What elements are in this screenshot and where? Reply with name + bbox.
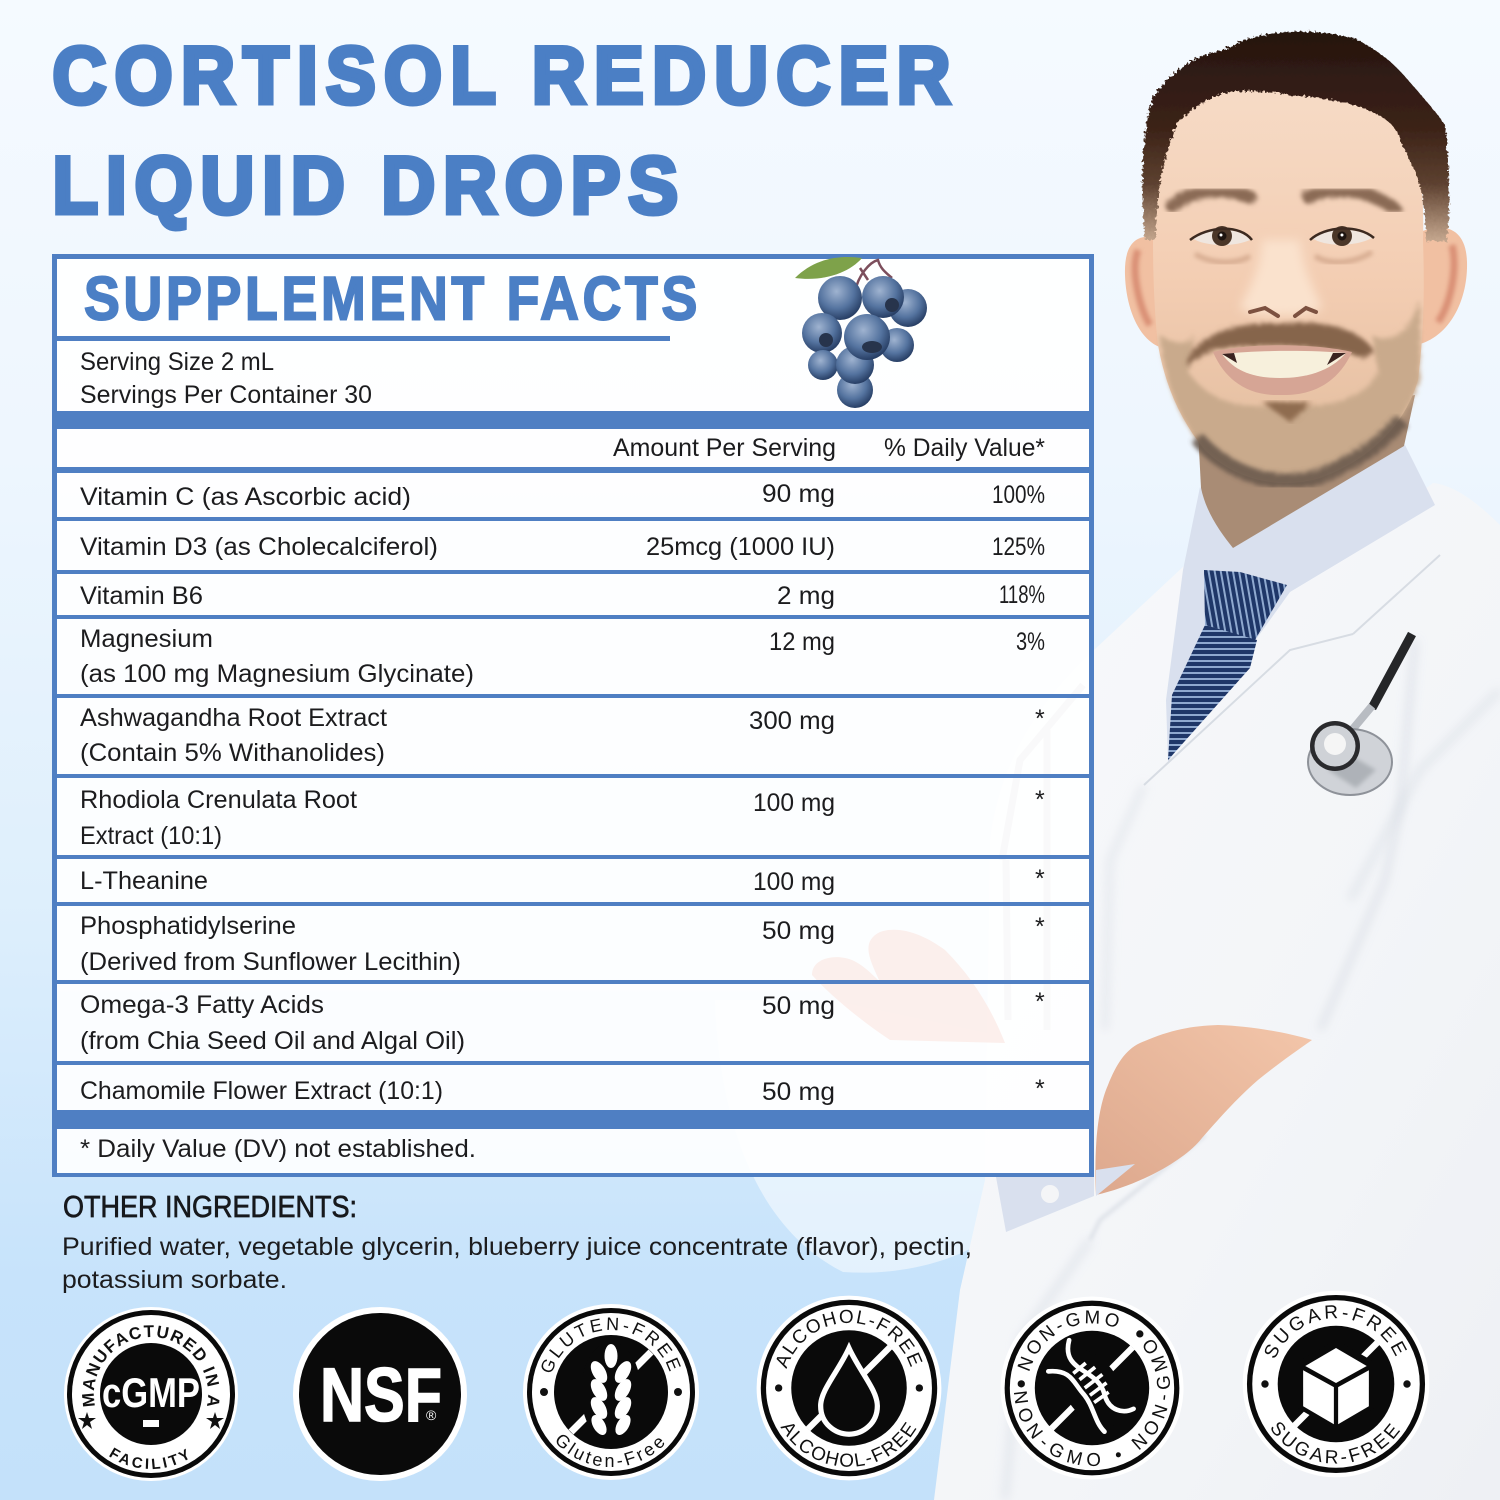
row: phosphatidylserine: * (1035, 913, 1045, 941)
row: vitamin B6 (80, 581, 1045, 610)
doctor: tie (1168, 570, 1287, 760)
row: rhodiola: * (1035, 786, 1045, 814)
row: chamomile: * (1035, 1075, 1045, 1103)
column headers: Amount Per Serving (613, 434, 836, 462)
row: vitamin B6: 118% (999, 581, 1045, 609)
row: ashwagandha: 300 mg (749, 707, 835, 735)
doctor: forearm (1095, 1025, 1312, 1195)
ingredient list (62, 1233, 972, 1294)
doctor: eyebrows (1172, 191, 1396, 210)
row: ashwagandha: Ashwagandha Root Extract (80, 704, 387, 732)
doctor: beard (1160, 300, 1420, 483)
row: vitamin B6: 2 mg (777, 582, 835, 610)
badge: gluten free (523, 1304, 699, 1480)
row: magnesium: 3% (1016, 628, 1045, 656)
badge: cGMP: FACILITY (109, 1448, 188, 1470)
row: rhodiola: Rhodiola Crenulata Root (80, 786, 357, 814)
badge: cGMP (64, 1307, 238, 1481)
doctor: faded sleeve behind table (715, 1000, 1020, 1273)
row: phosphatidylserine: 50 mg (762, 917, 835, 945)
other ingredients (62, 1189, 972, 1294)
ingredient list: potassium sorbate. (62, 1266, 287, 1294)
row: l-theanine (80, 865, 1045, 896)
badge: NSF (293, 1307, 467, 1481)
serving info: Serving Size 2 mL (80, 348, 274, 376)
row: magnesium: Magnesium (80, 625, 213, 653)
row: ashwagandha: (Contain 5% Withanolides) (80, 739, 385, 767)
column headers: % Daily Value* (884, 434, 1045, 462)
badge: non-gmo (1000, 1296, 1184, 1480)
doctor: ears (1125, 228, 1467, 347)
table background (54, 256, 1092, 1175)
heading: supplement facts: SUPPLEMENT FACTS (84, 265, 697, 333)
row: vitamin D3 (80, 533, 1045, 561)
doctor: coat fold shading (1005, 555, 1500, 1500)
row: vitamin D3: 125% (992, 533, 1045, 561)
doctor: moustache and mouth (1186, 323, 1374, 395)
row: phosphatidylserine (80, 912, 1045, 976)
row: omega-3: Omega-3 Fatty Acids (80, 991, 324, 1019)
badge: non-gmo: NON-GMO (1018, 1310, 1119, 1371)
badge: gluten free: Gluten-Free (556, 1434, 664, 1467)
row: vitamin B6: Vitamin B6 (80, 582, 203, 610)
icon: blueberries (795, 257, 927, 408)
badge: sugar free: SUGAR-FREE (1271, 1422, 1400, 1464)
row: chamomile: 50 mg (762, 1078, 835, 1106)
ingredient list: Purified water, vegetable glycerin, blueberry juice concentrate (flavor), pectin, (62, 1233, 972, 1261)
doctor: eyes (1190, 226, 1374, 262)
row: rhodiola: Extract (10:1) (80, 822, 222, 850)
row: l-theanine: * (1035, 865, 1045, 893)
badge: sugar free (1243, 1291, 1430, 1477)
badge: NSF: ® (426, 1407, 437, 1423)
row: magnesium (80, 625, 1045, 688)
badge: NSF: NSF (320, 1353, 442, 1438)
heading: other ingredients: OTHER INGREDIENTS: (63, 1189, 357, 1224)
row: chamomile: Chamomile Flower Extract (10:1) (80, 1077, 443, 1105)
row: chamomile (80, 1075, 1045, 1106)
serving info: Servings Per Container 30 (80, 381, 372, 409)
title (52, 31, 950, 231)
row: magnesium: (as 100 mg Magnesium Glycinate) (80, 660, 474, 688)
row: vitamin C: 100% (992, 481, 1045, 509)
row: ashwagandha: * (1035, 705, 1045, 733)
row: vitamin C: 90 mg (762, 480, 835, 508)
doctor: shirt (1166, 445, 1435, 762)
badge: non-gmo: NON-GMO • NON-GMO (1014, 1340, 1170, 1466)
badge: alcohol free (756, 1296, 942, 1480)
doctor: faint hand behind table (812, 930, 1005, 1043)
row: l-theanine: L-Theanine (80, 867, 208, 895)
row: vitamin C: Vitamin C (as Ascorbic acid) (80, 483, 411, 511)
serving info (80, 348, 372, 409)
column headers (613, 434, 1045, 462)
badge: cGMP: cGMP (102, 1369, 200, 1416)
doctor: shirt cuff (996, 1164, 1135, 1232)
title: LIQUID DROPS (52, 141, 678, 231)
doctor: face (1153, 88, 1424, 483)
row: l-theanine: 100 mg (753, 868, 835, 896)
badge: alcohol free: ALCOHOL-FREE (780, 1422, 916, 1467)
row: omega-3 (80, 988, 1045, 1055)
badge: gluten free: GLUTEN-FREE (542, 1318, 681, 1372)
row: ashwagandha (80, 704, 1045, 767)
row: vitamin D3: 25mcg (1000 IU) (646, 533, 835, 561)
row: phosphatidylserine: Phosphatidylserine (80, 912, 296, 940)
row: omega-3: * (1035, 988, 1045, 1016)
row: rhodiola: 100 mg (753, 789, 835, 817)
doctor: neck (1198, 395, 1415, 548)
doctor photo illustration (715, 32, 1500, 1500)
panel: supplement facts table (52, 254, 1094, 1177)
badge: alcohol free: ALCOHOL-FREE (776, 1310, 922, 1369)
row: rhodiola (80, 786, 1045, 850)
row: omega-3: 50 mg (762, 992, 835, 1020)
doctor: faint stethoscope behind table (1002, 685, 1083, 1030)
doctor: coat (934, 483, 1500, 1500)
row: vitamin D3: Vitamin D3 (as Cholecalciferol) (80, 533, 438, 561)
footnote: * Daily Value (DV) not established. (80, 1135, 476, 1163)
row: vitamin C (80, 480, 1045, 511)
row: omega-3: (from Chia Seed Oil and Algal Oil) (80, 1027, 465, 1055)
doctor: hair (1142, 32, 1449, 243)
table rules (52, 254, 1094, 1177)
doctor: ear shading (1135, 245, 1454, 325)
badge: cGMP: MANUFACTURED IN A (82, 1325, 220, 1406)
title: CORTISOL REDUCER (52, 31, 950, 121)
row: magnesium: 12 mg (769, 628, 835, 656)
doctor: stethoscope (1308, 634, 1412, 795)
doctor: nose (1240, 240, 1322, 316)
row: phosphatidylserine: (Derived from Sunflower Lecithin) (80, 948, 461, 976)
badge: sugar free: SUGAR-FREE (1264, 1305, 1407, 1358)
